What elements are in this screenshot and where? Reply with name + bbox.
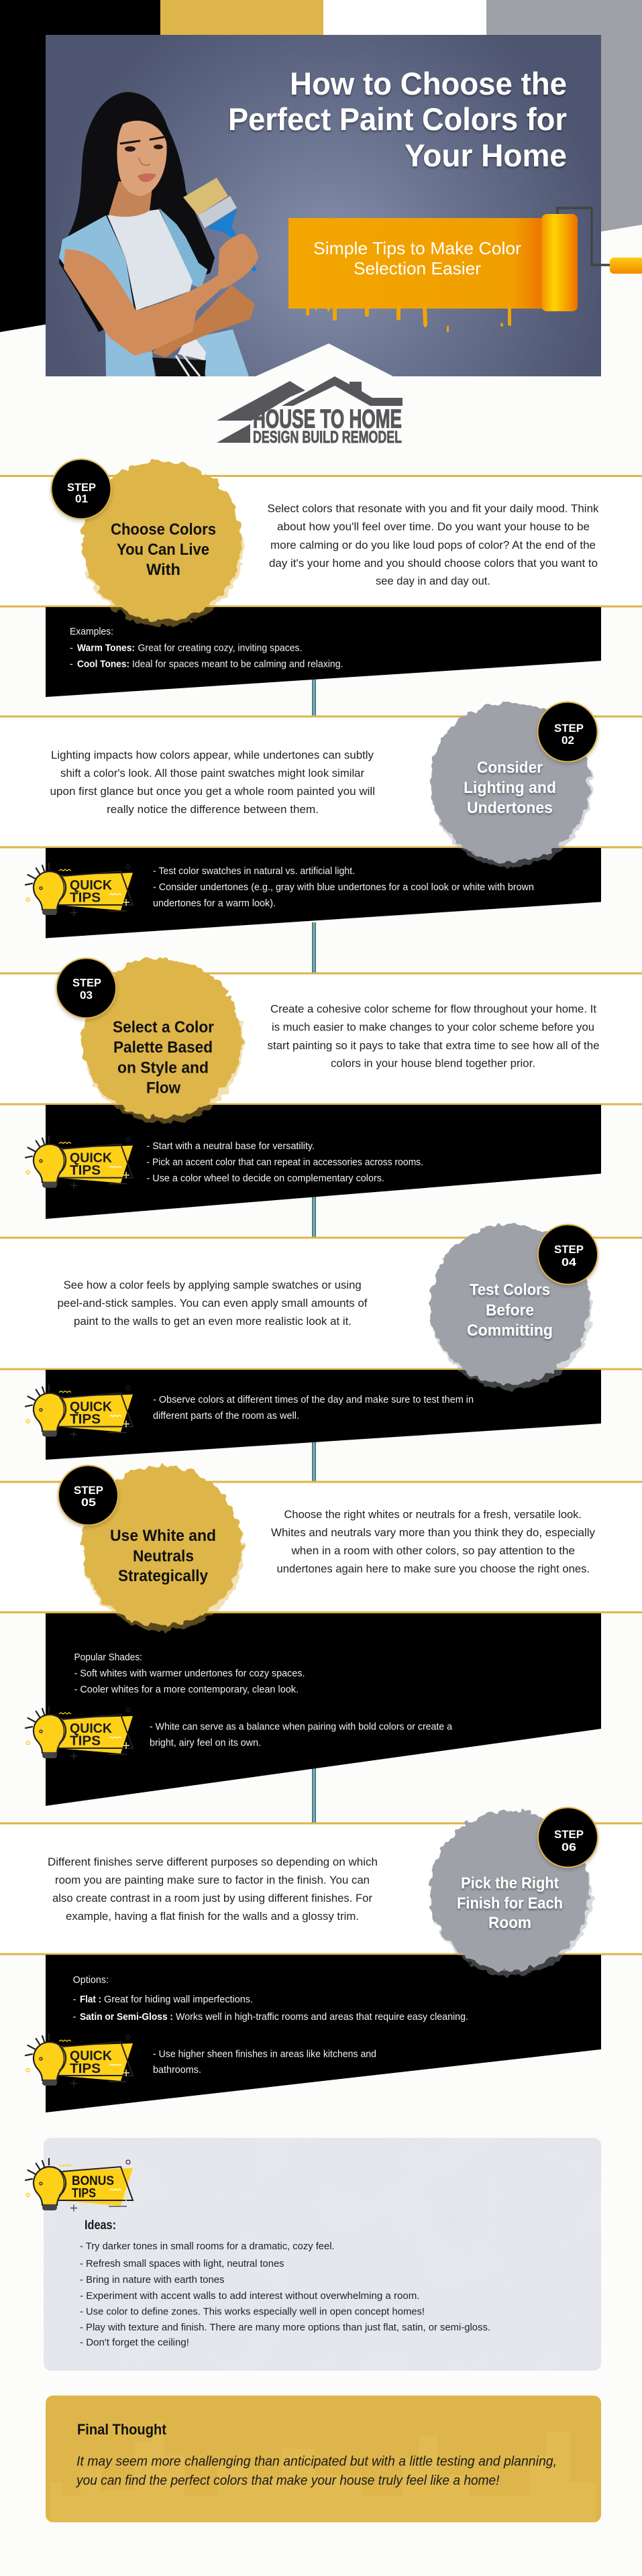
paint roller banner with subtitle bbox=[288, 208, 642, 333]
black examples panel: Great for creating cozy, inviting spaces. bbox=[138, 643, 302, 654]
icon: quick tips bulb: QUICK bbox=[70, 1721, 113, 1736]
body text: see day in and day out. bbox=[376, 574, 490, 588]
icon: quick tips bulb: TIPS bbox=[70, 2061, 101, 2076]
panel: step 2 bbox=[0, 702, 642, 938]
closing statement: It may seem more challenging than anticipated but with a little testing and planning, bbox=[76, 2454, 557, 2469]
black options panel: - bbox=[73, 2012, 76, 2023]
paint blob heading: Strategically bbox=[118, 1567, 209, 1585]
icon: bonus tips bulb: TIPS bbox=[72, 2187, 96, 2200]
icon: quick tips bulb bbox=[25, 2034, 133, 2086]
panel: step 1 bbox=[0, 459, 642, 697]
icon: quick tips bulb: TIPS bbox=[70, 1733, 101, 1748]
paint blob heading: Use White and bbox=[110, 1527, 216, 1545]
colour swatch stripes bbox=[0, 0, 642, 332]
paint blob heading: Neutrals bbox=[133, 1547, 194, 1566]
step badge: STEP bbox=[67, 481, 96, 494]
step badge: 06 bbox=[561, 1841, 576, 1854]
step badge bbox=[51, 459, 111, 519]
body text bbox=[267, 1003, 600, 1069]
paint blob heading: You Can Live bbox=[117, 541, 209, 559]
step badge bbox=[56, 958, 116, 1018]
paint blob heading: Room bbox=[488, 1914, 531, 1932]
body text: also create contrast in a room just by using different finishes. For bbox=[52, 1892, 372, 1904]
black options panel: - bbox=[73, 1994, 76, 2005]
black examples panel: Examples: bbox=[70, 627, 113, 637]
icon: quick tips bulb bbox=[25, 1385, 133, 1438]
body text: room you are painting make sure to factor in the finish. You can bbox=[55, 1874, 370, 1886]
body text: paint to the walls to get an even more realistic look at it. bbox=[74, 1315, 352, 1328]
logo: House to Home bbox=[217, 376, 403, 447]
icon: quick tips bulb: TIPS bbox=[70, 1412, 101, 1427]
body text: Choose the right whites or neutrals for a fresh, versatile look. bbox=[284, 1508, 582, 1521]
black shades panel bbox=[46, 1613, 601, 1806]
body text: when in a room with other colors, so pay attention to the bbox=[290, 1544, 575, 1557]
body text bbox=[50, 749, 375, 816]
icon: bonus tips bulb bbox=[25, 2159, 133, 2211]
ideas list: - Refresh small spaces with light, neutral tones bbox=[80, 2258, 284, 2269]
paint blob heading: Palette Based bbox=[113, 1038, 213, 1057]
black options panel: Options: bbox=[73, 1975, 109, 1986]
ideas list: Ideas: bbox=[85, 2218, 116, 2233]
logo: House to Home: DESIGN BUILD REMODEL bbox=[253, 428, 402, 447]
heading: main title: How to Choose the bbox=[290, 66, 567, 101]
black options panel: Great for hiding wall imperfections. bbox=[104, 1994, 253, 2005]
paint blob heading: Consider bbox=[477, 759, 543, 777]
paint blob heading: Committing bbox=[467, 1322, 553, 1340]
ideas list: - Don't forget the ceiling! bbox=[80, 2337, 189, 2349]
paint blob heading: Finish for Each bbox=[457, 1894, 563, 1913]
black quick tips panel: - Start with a neutral base for versatility. bbox=[146, 1141, 315, 1152]
body text: Different finishes serve different purposes so depending on which bbox=[48, 1856, 378, 1868]
paint blob heading: Before bbox=[486, 1301, 534, 1320]
step badge: STEP bbox=[554, 722, 584, 735]
black quick tips panel: - Pick an accent color that can repeat in accessories across rooms. bbox=[146, 1157, 423, 1168]
body text: upon first glance but once you get a whole room painted you will bbox=[50, 785, 375, 798]
black examples panel bbox=[46, 607, 601, 697]
step badge: STEP bbox=[74, 1484, 103, 1497]
black examples panel: - bbox=[70, 659, 73, 669]
body text: example, having a flat finish for the walls and a glossy trim. bbox=[66, 1910, 359, 1923]
black quick tips panel: undertones for a warm look). bbox=[153, 898, 276, 909]
body text: colors in your house blend together prior. bbox=[331, 1057, 535, 1069]
paint blob heading: Lighting and bbox=[464, 779, 556, 797]
body text bbox=[271, 1508, 595, 1575]
paint roller banner with subtitle: Selection Easier bbox=[354, 258, 481, 278]
icon: quick tips bulb: QUICK bbox=[70, 878, 113, 893]
paint blob heading: on Style and bbox=[117, 1059, 209, 1077]
panel: step 6 bbox=[0, 1807, 642, 2112]
body text: Select colors that resonate with you and fit your daily mood. Think bbox=[267, 502, 599, 515]
step badge: 03 bbox=[80, 989, 93, 1002]
heading: main title bbox=[228, 66, 567, 173]
step badge: 05 bbox=[81, 1496, 96, 1509]
black quick tips panel: different parts of the room as well. bbox=[153, 1411, 299, 1421]
chevron cut-out bbox=[256, 343, 393, 376]
paint blob heading: Flow bbox=[146, 1079, 180, 1097]
body text: undertones again here to make sure you choose the right ones. bbox=[276, 1562, 590, 1575]
step badge bbox=[538, 1807, 598, 1868]
body text: See how a color feels by applying sample swatches or using bbox=[64, 1279, 362, 1291]
paint roller banner with subtitle: Simple Tips to Make Color bbox=[313, 238, 521, 258]
body text: Whites and neutrals vary more than you think they do, especially bbox=[271, 1526, 595, 1539]
panel: final thought bbox=[46, 2396, 601, 2522]
step badge: STEP bbox=[72, 976, 101, 989]
black quick tips panel: - Test color swatches in natural vs. artificial light. bbox=[153, 866, 355, 877]
paint blob heading bbox=[82, 1466, 244, 1631]
panel: step 3 bbox=[0, 958, 642, 1219]
panel: step 5 bbox=[0, 1465, 642, 1806]
icon: quick tips bulb bbox=[25, 1707, 133, 1759]
heading: final thought: Final Thought bbox=[77, 2421, 167, 2438]
icon: quick tips bulb: QUICK bbox=[70, 2049, 113, 2063]
ideas list: - Try darker tones in small rooms for a dramatic, cozy feel. bbox=[80, 2241, 335, 2252]
body text: is much easier to make changes to your color scheme before you bbox=[272, 1021, 594, 1034]
black quick tips panel: - Observe colors at different times of the day and make sure to test them in bbox=[153, 1395, 474, 1405]
black examples panel: Warm Tones: bbox=[77, 643, 135, 654]
body text: Lighting impacts how colors appear, while undertones can subtly bbox=[51, 749, 374, 761]
black options panel: - Use higher sheen finishes in areas like kitchens and bbox=[153, 2049, 376, 2060]
black options panel bbox=[46, 1955, 601, 2112]
heading: main title: Your Home bbox=[405, 138, 567, 173]
black shades panel: bright, airy feel on its own. bbox=[150, 1737, 261, 1748]
step badge: 04 bbox=[561, 1256, 577, 1269]
paint blob heading: Select a Color bbox=[113, 1018, 214, 1036]
paint blob heading bbox=[430, 1224, 592, 1389]
icon: quick tips bulb: QUICK bbox=[70, 1400, 113, 1415]
icon: quick tips bulb: TIPS bbox=[70, 891, 101, 906]
body text: start painting so it pays to take that extra time to see how all of the bbox=[267, 1039, 600, 1052]
icon: bonus tips bulb: BONUS bbox=[72, 2174, 114, 2188]
ideas list: - Use color to define zones. This works especially well in open concept homes! bbox=[80, 2306, 425, 2318]
paint blob heading: Choose Colors bbox=[111, 521, 216, 539]
black shades panel: - Soft whites with warmer undertones for cozy spaces. bbox=[74, 1668, 305, 1679]
body text bbox=[58, 1279, 368, 1328]
step badge: STEP bbox=[554, 1828, 584, 1841]
paint blob heading bbox=[430, 702, 592, 867]
black quick tips panel: - Use a color wheel to decide on complementary colors. bbox=[146, 1173, 384, 1184]
paint blob heading: With bbox=[146, 561, 180, 579]
black shades panel: Popular Shades: bbox=[74, 1652, 142, 1663]
black quick tips panel: - Consider undertones (e.g., gray with blue undertones for a cool look or white with brown bbox=[153, 882, 534, 893]
body text bbox=[267, 502, 599, 588]
panel: bonus tips bbox=[25, 2138, 601, 2371]
ideas list: - Experiment with accent walls to add interest without overwhelming a room. bbox=[80, 2290, 420, 2302]
logo: House to Home: HOUSE TO HOME bbox=[253, 405, 402, 433]
black examples panel: - bbox=[70, 643, 73, 654]
paint blob heading bbox=[82, 461, 244, 626]
body text: shift a color's look. All those paint swatches might look similar bbox=[60, 767, 364, 780]
step badge: STEP bbox=[554, 1243, 584, 1256]
black examples panel: Ideal for spaces meant to be calming and relaxing. bbox=[132, 659, 343, 669]
ideas list: - Play with texture and finish. There are many more options than just flat, satin, or semi-gloss. bbox=[80, 2322, 490, 2333]
panel: step 4 bbox=[0, 1224, 642, 1460]
black options panel: Satin or Semi-Gloss : bbox=[80, 2012, 173, 2023]
paint blob heading bbox=[82, 958, 244, 1123]
body text: more calming or do you like loud pops of color? At the end of the bbox=[270, 539, 596, 551]
step badge: 01 bbox=[75, 492, 88, 505]
step badge bbox=[538, 702, 597, 762]
illustration: woman holding paint brush bbox=[59, 92, 258, 376]
heading: main title: Perfect Paint Colors for bbox=[228, 101, 567, 137]
black options panel: Flat : bbox=[80, 1994, 101, 2005]
black quick tips panel bbox=[46, 848, 601, 938]
black options panel: bathrooms. bbox=[153, 2065, 201, 2076]
body text bbox=[48, 1856, 378, 1923]
black quick tips panel bbox=[46, 1105, 601, 1219]
ideas list: - Bring in nature with earth tones bbox=[80, 2274, 224, 2286]
connectors between steps bbox=[312, 674, 316, 1823]
paint blob heading: Undertones bbox=[467, 799, 553, 817]
paint blob heading: Pick the Right bbox=[461, 1874, 559, 1892]
black options panel: Works well in high-traffic rooms and areas that require easy cleaning. bbox=[176, 2012, 468, 2023]
step badge bbox=[538, 1225, 598, 1284]
step badge: 02 bbox=[561, 734, 574, 747]
body text: Create a cohesive color scheme for flow throughout your home. It bbox=[270, 1003, 596, 1016]
black shades panel: - Cooler whites for a more contemporary, clean look. bbox=[74, 1684, 299, 1695]
paint blob heading: Test Colors bbox=[470, 1281, 550, 1299]
icon: quick tips bulb bbox=[25, 1136, 133, 1189]
black shades panel: - White can serve as a balance when pairing with bold colors or create a bbox=[150, 1721, 453, 1732]
icon: quick tips bulb: TIPS bbox=[70, 1163, 101, 1178]
closing statement bbox=[75, 2454, 557, 2488]
ideas list bbox=[80, 2218, 490, 2349]
body text: peel-and-stick samples. You can even apply small amounts of bbox=[58, 1297, 368, 1309]
black quick tips panel bbox=[46, 1370, 601, 1460]
black examples panel: Cool Tones: bbox=[77, 659, 129, 669]
body text: day it's your home and you should choose colors that you want to bbox=[269, 557, 598, 570]
hero panel bbox=[46, 35, 642, 376]
icon: quick tips bulb: QUICK bbox=[70, 1151, 113, 1166]
body text: really notice the difference between them. bbox=[107, 803, 319, 816]
step badge bbox=[58, 1465, 118, 1525]
body text: about how you'll feel over time. Do you want your house to be bbox=[277, 521, 590, 533]
paint blob heading bbox=[430, 1811, 592, 1976]
closing statement: you can find the perfect colors that make your house truly feel like a home! bbox=[75, 2473, 500, 2488]
icon: quick tips bulb bbox=[25, 863, 133, 916]
